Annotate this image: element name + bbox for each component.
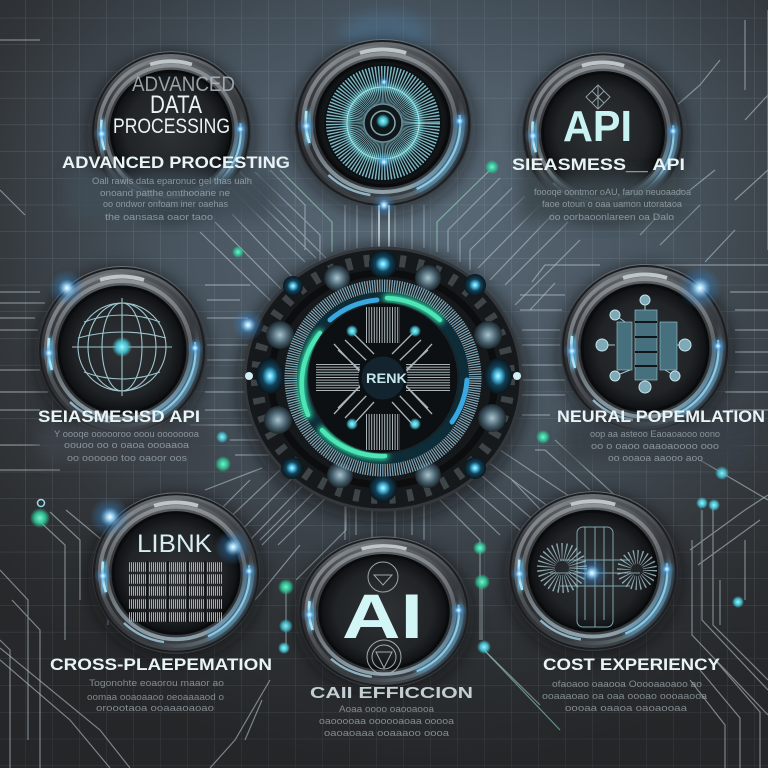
ring: seismic api <box>34 266 210 443</box>
icon: globe <box>72 298 172 396</box>
circuit nodes <box>30 160 744 654</box>
icon: neural panels <box>596 295 691 393</box>
ring: neural population <box>557 264 733 441</box>
heading: cross-platform: CROSS-PLAEPEMATION <box>50 655 272 674</box>
icon: radial data eye <box>324 64 442 182</box>
badge: api: API <box>563 102 632 151</box>
heading: cost experience: COST EXPERIENCY <box>543 655 721 674</box>
panel: seismic api <box>34 266 210 463</box>
band fade under ring <box>40 422 210 462</box>
band fade under ring <box>70 172 275 217</box>
ring: seamless api <box>519 52 687 222</box>
hub center <box>360 355 406 401</box>
description: cross-platform <box>87 678 224 713</box>
description: advanced processing: oo ondwor onfoam iner oaehas <box>103 199 228 209</box>
description: neural population: oop aa asteoo Eaoaoaooo oono <box>590 429 720 439</box>
icon: crest top <box>368 562 398 592</box>
band fade under ring <box>565 422 745 462</box>
ring: advanced data processing <box>87 51 255 219</box>
band fade under ring <box>520 176 685 221</box>
description: cross-platform: oomaa ooaoaaoo oeoaaaaod o <box>87 692 224 702</box>
hub orbs <box>245 250 521 502</box>
panel: seamless api <box>512 52 691 222</box>
panel: ai efficiency <box>294 536 474 738</box>
connector: top to hub <box>379 205 389 252</box>
heading: ai efficiency: CAII EFFICCION <box>310 685 473 702</box>
light flares <box>49 193 722 565</box>
hub outer casing <box>245 248 521 510</box>
hub circuit core <box>308 303 458 453</box>
hub label: RENK <box>366 370 407 386</box>
description: ai efficiency: Aoaa oooo oaooaooa <box>339 704 434 714</box>
description: cost experience: ofaoaoo oaaooa Ooooaaoaoo ao <box>552 679 702 689</box>
description: neural population: oo ooaoa aaooo aoo <box>608 453 703 463</box>
description: seismic api <box>54 429 199 463</box>
description: seismic api: oo oooooo too oaoor oos <box>67 453 188 463</box>
description: seamless api: foooqe oontmor oAU, faruo neuoaadoa <box>534 187 691 197</box>
panel: cross-platform link <box>50 492 272 713</box>
heading: seismic api: SEIASMESISD API <box>38 407 200 426</box>
description: seismic api: oouoo oo o oaoa oooaaoa <box>64 440 189 450</box>
icon: crest bottom <box>367 640 401 674</box>
description: cross-platform: oroootaoa ooaaaoaoao <box>96 703 214 713</box>
icon: chip brain <box>546 527 650 627</box>
description: seamless api: oo oorbaoonlareen oa Dalo <box>549 212 674 222</box>
badge: libnk: LIBNK <box>137 530 212 558</box>
description: ai efficiency: oaoaoaaa ooaaaoo oooa <box>324 728 449 738</box>
description: cost experience: oooaa oaaoa oaoaooaa <box>565 703 687 713</box>
ring: ai efficiency <box>294 536 474 696</box>
description: advanced processing: Oall rawis data eparonuc gel thas ualh <box>92 176 252 186</box>
heading: seamless api: SIEASMESS__ API <box>512 155 685 174</box>
panel: neural population <box>557 264 765 463</box>
panel: advanced data processing <box>62 51 290 222</box>
description: seismic api: Y oooqe oooooroo ooou oooooooa <box>54 429 199 439</box>
ring: central eye <box>291 39 475 216</box>
panel: central eye <box>291 39 475 216</box>
panel: cost experience <box>504 491 721 713</box>
badge: data: DATA <box>150 91 202 119</box>
heading: advanced processing: ADVANCED PROCESTING <box>62 153 290 172</box>
badge: advanced: ADVANCED <box>132 73 235 96</box>
ring: cost experience <box>504 491 682 659</box>
description: advanced processing: onoand patthe omthooane ne <box>100 188 230 198</box>
description: neural population <box>590 429 720 463</box>
description: ai efficiency: oaooooaa oooooaoaa ooooa <box>319 716 454 726</box>
hub crystals <box>264 265 506 488</box>
description: advanced processing <box>92 176 252 222</box>
description: ai efficiency <box>319 704 454 738</box>
ring: cross-platform <box>88 492 264 662</box>
hub shadow <box>237 246 529 522</box>
hub tick ring <box>291 286 475 470</box>
icon: api crest <box>586 85 610 109</box>
hub glow ring <box>302 297 467 459</box>
badge: ai: AI <box>342 582 423 652</box>
heading: neural population: NEURAL POPEMLATION <box>557 407 765 426</box>
description: seamless api <box>534 187 691 222</box>
description: seamless api: faoe otoun o oaa uamon utorataoa <box>542 199 682 209</box>
description: cost experience <box>542 679 707 713</box>
description: advanced processing: the oansasa oaor taoo <box>105 212 213 222</box>
description: neural population: oo o oaoo oaaoaoooo ooo <box>591 441 719 451</box>
central hub medallion <box>237 246 529 522</box>
icon: data table <box>129 561 222 623</box>
description: cross-platform: Togonohte eoaorou maaor ao <box>89 678 224 688</box>
badge: processing: PROCESSING <box>113 115 230 138</box>
description: cost experience: ooaaaoao oa oaa oooao oooaaooa <box>542 691 707 701</box>
